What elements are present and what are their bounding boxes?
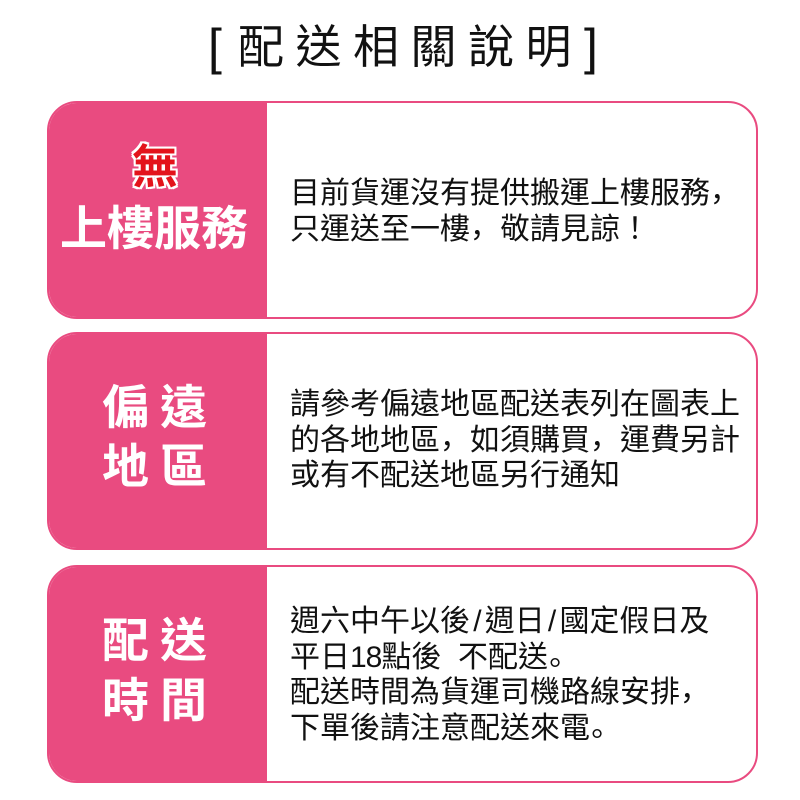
body text: 下單後請注意配送來電。 [290, 712, 612, 752]
panel: delivery time [47, 565, 758, 783]
title: ] [584, 19, 598, 75]
heading text: 配送 [102, 614, 218, 667]
body text: 請參考偏遠地區配送表列在圖表上 [290, 388, 740, 421]
heading text: 地區 [102, 440, 218, 493]
body text: 平日18點後 不配送。 [290, 641, 570, 681]
panel heading: delivery time [47, 565, 267, 783]
panel heading: remote areas [47, 332, 267, 550]
title: [ [208, 19, 222, 75]
body text [290, 388, 740, 492]
title: 配送相關說明 [238, 21, 583, 73]
body text: 或有不配送地區另行通知 [290, 459, 620, 492]
heading text: 上樓服務 [60, 202, 248, 255]
body text: 的各地地區， 如須購買， 運費另計 [290, 424, 740, 464]
heading text: 時間 [102, 674, 218, 727]
heading text: 偏遠 [102, 381, 218, 434]
body text: 目前貨運沒有提供搬運上樓服務， [290, 177, 732, 217]
body text: 配送時間為貨運司機路線安排， [290, 676, 702, 716]
body text: 週六中午以後/週日/國定假日及 [290, 605, 709, 638]
body text [290, 177, 732, 253]
body text: 只運送至一樓， 敬請見諒！ [290, 213, 650, 253]
body text [290, 605, 709, 752]
icon: red no character: 無 [132, 141, 178, 193]
panel: remote areas [47, 332, 758, 550]
panel: stair service [47, 101, 758, 319]
panel heading: no stair service [47, 101, 267, 319]
